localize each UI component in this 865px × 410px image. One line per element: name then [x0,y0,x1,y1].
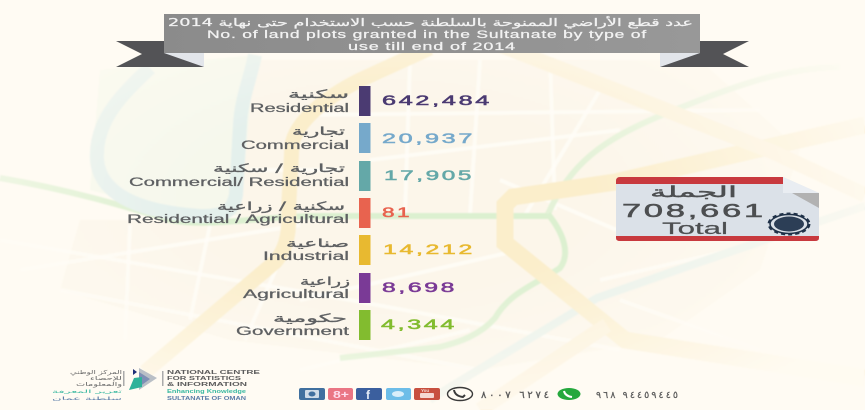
row: commercial: تجارية [292,124,345,139]
row: industrial: 14,212 [383,241,475,257]
row: commercial / residential: تجارية / سكنية [213,161,345,176]
whatsapp number: ٩٦٨ ٩٤٤٥٩٤٤٥ [596,390,678,401]
row: residential / agricultural: Residential / Agricultural [127,214,349,226]
row: agricultural: 8,698 [382,279,457,295]
row: agricultural: Agricultural [243,289,349,301]
row: commercial / residential: 17,905 [384,167,474,183]
row: agricultural [243,273,457,303]
row: residential / agricultural: 81 [382,204,412,220]
logo arabic text [52,369,124,402]
logo english text: SULTANATE OF OMAN [167,396,246,402]
phone number: ٨٠٠٧ ٦٢٧٤ [481,390,549,401]
social icons [299,388,440,402]
icon: twitter [386,388,411,400]
logo english text: NATIONAL CENTRE [167,370,260,376]
total card: الجملة [650,183,737,201]
row: government [236,310,457,340]
icon: google plus: 8+ [333,390,349,401]
row: industrial [263,235,475,265]
whatsapp number [558,388,678,401]
title ribbon [116,14,749,67]
icon: phone [448,388,472,400]
row: residential: سكنية [288,87,349,101]
logo arabic text: سلطنة عمان [52,397,123,402]
logo english text: Enhancing Knowledge [167,389,246,395]
logo arabic text: تعزيز المعرفة [52,390,124,395]
row: residential [250,86,492,116]
row: commercial / residential [129,161,474,191]
logo: national centre [52,368,260,402]
icon: whatsapp [558,388,580,400]
icon: gear badge [769,214,809,234]
logo arabic text: المركز الوطني [70,369,123,376]
title text: عدد قطع الأراضي الممنوحة بالسلطنة حسب الاستخدام حتى نهاية 2014 [168,16,693,29]
row: government: Government [236,326,350,338]
row: agricultural: زراعية [300,274,350,289]
title text [168,16,693,53]
row: industrial: Industrial [263,251,349,263]
yellow roads [145,45,865,410]
total card [616,177,819,241]
icon: google plus [328,388,353,401]
row: industrial: صناعية [286,236,349,250]
icon: facebook: f [366,388,371,402]
row: government: 4,344 [381,316,457,332]
row: commercial: 20,937 [382,130,475,146]
logo mark [129,368,157,390]
row: residential: 642,484 [382,92,492,108]
left ribbon tail [116,41,204,67]
title banner [164,14,700,53]
logo english text [167,370,260,402]
logo english text: & INFORMATION [167,382,247,388]
icon: youtube: You [421,388,429,393]
row: commercial: Commercial [241,140,349,152]
logo english text: FOR STATISTICS [167,376,241,382]
row: residential / agricultural: سكنية / زراعية [217,199,345,214]
row: government: حكومية [273,311,347,326]
total card: Total [662,219,728,238]
total card: 708,661 [622,201,766,221]
river [97,55,255,216]
icon: instagram [299,388,325,400]
row: residential / agricultural [127,198,412,228]
logo arabic text: والمعلومات [76,382,123,388]
green road [0,67,840,358]
logo arabic text: للإحصاء [90,376,123,382]
row: commercial [241,123,475,153]
row: residential: Residential [250,103,349,115]
icon: youtube [414,388,440,400]
title text: No. of land plots granted in the Sultanate by type of [207,29,648,41]
title text: use till end of 2014 [348,41,516,53]
right ribbon tail [660,41,749,67]
row: commercial / residential: Commercial/ Residential [129,177,349,189]
phone number [448,388,549,401]
icon: facebook [356,388,382,402]
